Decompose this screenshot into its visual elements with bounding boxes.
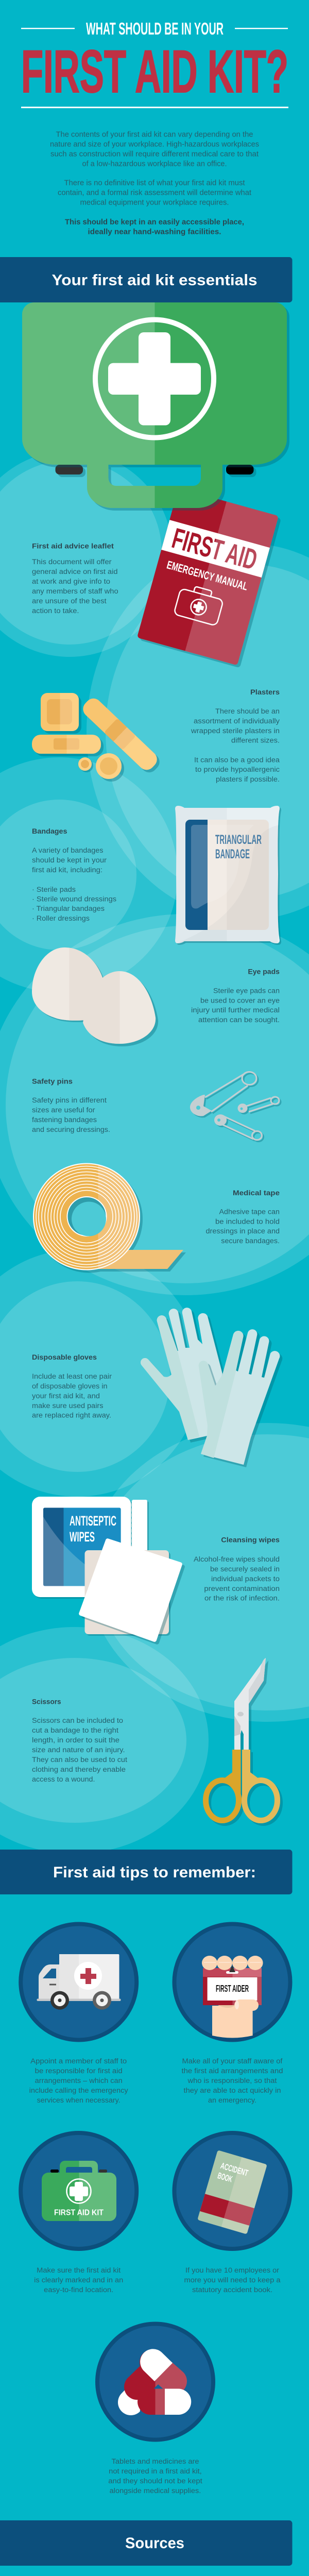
text: plasters: to provide hypoallergenic xyxy=(195,766,280,773)
tip circle: tablets and medicines xyxy=(97,2324,213,2440)
text: eye pads xyxy=(191,968,280,1024)
text: disposable gloves: Include at least one pair xyxy=(32,1372,112,1380)
text: plasters: different sizes. xyxy=(231,737,280,744)
title: what should be in your: WHAT SHOULD BE IN YOUR xyxy=(86,19,224,38)
text: plasters xyxy=(191,688,280,783)
banner: your first aid kit essentials xyxy=(0,257,293,302)
text: cleansing wipes: or the risk of infection. xyxy=(204,1594,280,1602)
icon: accident book xyxy=(197,2150,267,2234)
text: medical tape: be included to hold xyxy=(215,1217,280,1225)
banner: sources xyxy=(0,2520,293,2566)
text: bandages: Bandages xyxy=(32,827,67,835)
title rule xyxy=(21,107,288,108)
illustration: safety pins xyxy=(190,1072,279,1140)
illustration: medical tape xyxy=(33,1163,183,1270)
icon: ambulance xyxy=(37,1954,121,2010)
text: safety pins: Safety pins xyxy=(32,1077,73,1085)
text: scissors: Scissors can be included to xyxy=(32,1717,123,1724)
text: scissors: access to a wound. xyxy=(32,1775,95,1783)
text: scissors: length, in order to suit the xyxy=(32,1736,119,1744)
text: bandages: · Sterile pads xyxy=(32,886,76,893)
intro text xyxy=(50,130,259,236)
text: medical tape: Adhesive tape can xyxy=(219,1208,280,1216)
illustration: first aid leaflet xyxy=(137,488,279,666)
tip text: appoint a member of staff xyxy=(29,2057,128,2104)
illustration: triangular bandage pack: TRIANGULAR xyxy=(215,833,262,847)
text: first aid advice leaflet: general advice on first aid xyxy=(32,568,117,575)
tip text: clearly marked kit: Make sure the first aid kit xyxy=(37,2266,121,2274)
icon: pills xyxy=(118,2349,191,2415)
text: bandages: · Triangular bandages xyxy=(32,905,105,912)
illustration: disposable gloves xyxy=(141,1308,280,1465)
tip text: appoint a member of staff: Appoint a member of staff to xyxy=(30,2057,127,2065)
tip text: make all staff aware: the first aid arrangements and xyxy=(181,2067,283,2075)
icon: small first aid kit: FIRST AID KIT xyxy=(54,2208,104,2217)
text: plasters: There should be an xyxy=(215,707,280,715)
tip circle: accident book xyxy=(174,2133,290,2249)
text: disposable gloves: of disposable gloves in xyxy=(32,1382,108,1390)
illustration: plasters xyxy=(32,693,160,779)
text: plasters: wrapped sterile plasters in xyxy=(191,727,280,735)
intro text: nature and size of your workplace. High-hazardous workplaces xyxy=(50,140,259,148)
tip text: clearly marked kit: easy-to-find location. xyxy=(44,2286,113,2294)
banner: first aid tips to remember: First aid tips to remember: xyxy=(53,1864,256,1881)
tip text: make all staff aware: an emergency. xyxy=(208,2096,256,2104)
tip circle: first aid kit xyxy=(21,2133,136,2249)
text: medical tape: dressings in place and xyxy=(206,1227,280,1235)
illustration: first aid leaflet: EMERGENCY MANUAL xyxy=(165,558,249,593)
tip text: tablets and medicines xyxy=(108,2458,202,2495)
text: first aid advice leaflet xyxy=(32,542,118,615)
text: scissors: cut a bandage to the right xyxy=(32,1726,118,1734)
text: cleansing wipes: be securely sealed in xyxy=(210,1565,280,1573)
text: cleansing wipes: Alcohol-free wipes should xyxy=(194,1555,280,1563)
tip text: appoint a member of staff: include calling the emergency xyxy=(29,2087,128,2094)
text: first aid advice leaflet: First aid advice leaflet xyxy=(32,542,114,550)
text: bandages xyxy=(32,827,116,922)
text: disposable gloves: make sure used pairs xyxy=(32,1402,104,1410)
text: safety pins: sizes are useful for xyxy=(32,1106,95,1114)
illustration: antiseptic wipes: ANTISEPTIC xyxy=(70,1513,116,1529)
text: bandages: · Sterile wound dressings xyxy=(32,895,116,903)
tip text: statutory accident book: statutory accident book. xyxy=(192,2286,272,2294)
intro text: The contents of your first aid kit can vary depending on the xyxy=(56,130,253,139)
intro text: of a low-hazardous workplace like an office. xyxy=(82,160,227,168)
text: disposable gloves: Disposable gloves xyxy=(32,1353,97,1361)
text: bandages: first aid kit, including: xyxy=(32,866,102,874)
text: first aid advice leaflet: any members of staff who xyxy=(32,587,118,595)
text: scissors xyxy=(32,1697,127,1783)
icon: accident book: BOOK xyxy=(216,2171,234,2184)
text: safety pins: fastening bandages xyxy=(32,1116,97,1124)
tip text: tablets and medicines: and they should not be kept xyxy=(108,2477,202,2485)
text: medical tape: Medical tape xyxy=(233,1189,280,1197)
intro text: contain, and a formal risk assessment will determine what xyxy=(58,189,252,197)
background circles xyxy=(0,451,309,1854)
tip text: tablets and medicines: alongside medical supplies. xyxy=(110,2487,201,2495)
illustration: antiseptic wipes xyxy=(32,1497,180,1640)
tip text: make all staff aware: who is responsible, so that xyxy=(187,2077,277,2084)
banner: sources: Sources xyxy=(125,2535,184,2552)
text: eye pads: injury until further medical xyxy=(191,1006,280,1014)
text: plasters: plasters if possible. xyxy=(216,775,280,783)
text: eye pads: Sterile eye pads can xyxy=(213,987,280,994)
tip text: make all staff aware: they are able to act quickly in xyxy=(183,2087,281,2094)
illustration: scissors xyxy=(206,1658,277,1821)
illustration: eye pads xyxy=(32,947,156,1044)
tip text: statutory accident book: more you will need to keep a xyxy=(184,2276,281,2284)
tip text: appoint a member of staff: be responsible for first aid xyxy=(35,2067,123,2075)
text: scissors: size and nature of an injury. xyxy=(32,1746,125,1754)
illustration: triangular bandage pack xyxy=(175,806,280,943)
text: first aid advice leaflet: at work and give info to xyxy=(32,578,110,585)
tip text: tablets and medicines: Tablets and medicines are xyxy=(111,2458,199,2465)
text: scissors: Scissors xyxy=(32,1697,61,1705)
text: first aid advice leaflet: This document will offer xyxy=(32,558,112,566)
text: first aid advice leaflet: are unsure of the best xyxy=(32,597,107,605)
intro text: There is no definitive list of what your first aid kit must xyxy=(64,178,245,188)
tip text: make all staff aware xyxy=(181,2057,283,2104)
text: bandages: should be kept in your xyxy=(32,856,107,864)
text: first aid advice leaflet: action to take. xyxy=(32,607,79,615)
text: plasters: It can also be a good idea xyxy=(194,756,280,764)
text: disposable gloves: are replaced right away. xyxy=(32,1412,111,1419)
text: plasters: Plasters xyxy=(250,688,280,696)
text: cleansing wipes: individual packets to xyxy=(211,1575,280,1583)
illustration: antiseptic wipes: WIPES xyxy=(70,1529,95,1545)
banner: first aid tips to remember xyxy=(0,1850,293,1894)
intro text: medical equipment your workplace requires. xyxy=(80,198,229,207)
illustration: triangular bandage pack: BANDAGE xyxy=(215,847,250,861)
tip text: clearly marked kit: is clearly marked and in an xyxy=(34,2276,123,2284)
text: safety pins: and securing dressings. xyxy=(32,1126,110,1133)
icon: small first aid kit xyxy=(42,2161,116,2221)
banner: your first aid kit essentials: Your first aid kit essentials xyxy=(52,272,258,289)
text: cleansing wipes xyxy=(194,1535,280,1602)
tip circle: ambulance xyxy=(21,1924,136,2040)
tip text: appoint a member of staff: services when necessary. xyxy=(37,2096,121,2104)
illustration: first aid leaflet: FIRST AID xyxy=(169,521,261,576)
text: cleansing wipes: Cleansing wipes xyxy=(221,1535,280,1544)
icon: hand holding badge xyxy=(202,1956,263,2038)
text: safety pins: Safety pins in different xyxy=(32,1096,107,1104)
text: disposable gloves: your first aid kit, and xyxy=(32,1392,100,1400)
tip text: make all staff aware: Make all of your staff aware of xyxy=(182,2057,283,2065)
tip text: appoint a member of staff: arrangements – which can xyxy=(35,2077,123,2084)
text: medical tape: secure bandages. xyxy=(221,1237,280,1245)
text: bandages: · Roller dressings xyxy=(32,914,90,922)
intro text: ideally near hand-washing facilities. xyxy=(88,228,221,236)
text: eye pads: attention can be sought. xyxy=(198,1016,280,1024)
tip text: statutory accident book xyxy=(184,2266,281,2294)
illustration: first aid kit xyxy=(22,302,287,508)
tip circle: first aider badge xyxy=(174,1924,290,2040)
icon: hand holding badge: FIRST AIDER xyxy=(216,1984,249,1994)
text: cleansing wipes: prevent contamination xyxy=(204,1585,280,1592)
tip text: statutory accident book: If you have 10 employees or xyxy=(185,2266,280,2274)
text: plasters: assortment of individually xyxy=(194,717,280,725)
tip text: clearly marked kit xyxy=(34,2266,123,2294)
text: eye pads: be used to cover an eye xyxy=(200,996,280,1005)
text: medical tape xyxy=(206,1189,280,1245)
text: bandages: A variety of bandages xyxy=(32,846,104,854)
text: disposable gloves xyxy=(32,1353,112,1419)
tip text: tablets and medicines: not required in a first aid kit, xyxy=(109,2467,202,2475)
text: scissors: clothing and thereby enable xyxy=(32,1766,126,1773)
intro text: such as construction will require different medical care to that xyxy=(50,149,259,159)
text: scissors: They can also be used to cut xyxy=(32,1756,127,1764)
intro text: This should be kept in an easily accessible place, xyxy=(65,217,244,227)
icon: accident book: ACCIDENT xyxy=(219,2161,249,2178)
text: safety pins xyxy=(32,1077,110,1133)
text: eye pads: Eye pads xyxy=(248,968,280,976)
